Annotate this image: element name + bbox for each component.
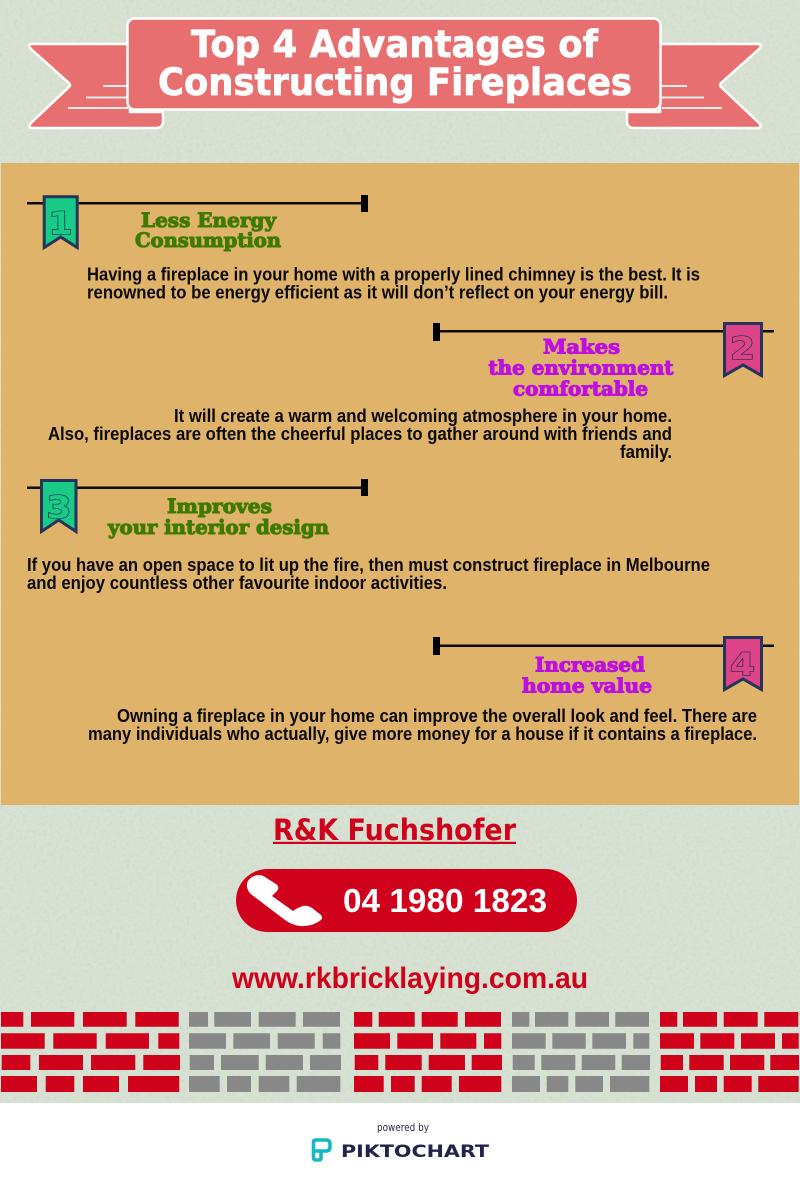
grey bricks right: [512, 1012, 650, 1092]
body text 1: renowned to be energy efficient as it will don’t reflect on your energy bill.: [87, 282, 668, 302]
title text: Constructing Fireplaces: [158, 61, 632, 104]
powered by label: powered by: [377, 1122, 429, 1134]
left ribbon tail: [29, 44, 163, 128]
title banner: [29, 18, 761, 128]
body text 3: and enjoy countless other favourite indoor activities.: [27, 572, 447, 593]
phone pill: [236, 869, 577, 932]
timeline rule 4: [433, 637, 774, 655]
body text 3: If you have an open space to lit up the fire, then must construct fireplace in Melbourne: [27, 554, 710, 575]
phone number: 04 1980 1823: [343, 882, 547, 919]
icon: bookmark 3: 3: [46, 490, 72, 526]
red bricks right: [660, 1012, 799, 1092]
red bricks centre: [354, 1012, 502, 1092]
advantage 1: [27, 195, 700, 302]
heading 4: Increased: [535, 652, 645, 676]
advantage 2: [48, 323, 774, 462]
grey bricks left: [189, 1012, 341, 1092]
icon: bookmark 2: 2: [730, 331, 755, 367]
timeline rule 3: [27, 479, 368, 496]
body text 2: Also, fireplaces are often the cheerful places to gather around with friends and: [48, 423, 672, 444]
red bricks left: [1, 1012, 180, 1092]
banner panel: [128, 18, 660, 110]
right ribbon tail: [627, 44, 761, 128]
panel: advantages: [1, 163, 799, 805]
icon: bookmark 4: [724, 638, 762, 690]
heading 3: Improves: [167, 494, 272, 518]
icon: bookmark 1: [44, 197, 77, 248]
heading 3: your interior design: [107, 515, 329, 539]
icon: bookmark 4: 4: [730, 647, 755, 683]
icon: bookmark 3: [42, 480, 76, 532]
title text: Top 4 Advantages of: [191, 23, 599, 66]
advantage 4: [88, 637, 774, 744]
body text 2: family.: [620, 441, 672, 462]
heading 4: home value: [522, 674, 652, 698]
brick wall: [1, 1012, 799, 1092]
advantage 3: [27, 479, 710, 593]
body text 2: It will create a warm and welcoming atmosphere in your home.: [174, 405, 672, 426]
heading 2: comfortable: [513, 376, 648, 400]
website: www.rkbricklaying.com.au: [231, 962, 588, 995]
heading 1: Consumption: [135, 228, 281, 252]
company name: R&K Fuchshofer: [273, 813, 517, 847]
heading 2: Makes: [543, 334, 620, 358]
icon: Piktochart logo: [314, 1140, 330, 1160]
icon: phone handset: [247, 875, 322, 926]
timeline rule 2: [433, 323, 774, 341]
heading 2: the environment: [488, 356, 674, 380]
body text 1: Having a fireplace in your home with a properly lined chimney is the best. It is: [87, 264, 700, 284]
footer: powered by Piktochart: [0, 1103, 800, 1183]
icon: bookmark 2: [724, 324, 762, 376]
heading 1: Less Energy: [141, 208, 277, 232]
timeline rule 1: [27, 195, 368, 212]
icon: bookmark 1: 1: [48, 206, 72, 242]
wordmark: PIKTOCHART: [341, 1142, 489, 1162]
